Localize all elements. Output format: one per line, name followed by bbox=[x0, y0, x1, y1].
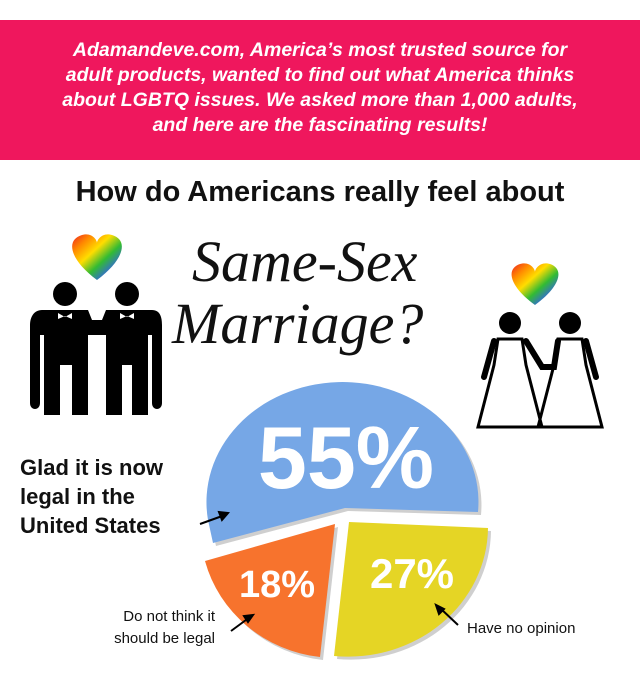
label: 18%: should be legal bbox=[114, 630, 215, 647]
banner: and here are the fascinating results! bbox=[153, 114, 487, 136]
label: 55% bbox=[20, 455, 163, 538]
slice: 18%: 18% bbox=[239, 564, 315, 606]
banner: Adamandeve.com, America’s most trusted source for bbox=[73, 39, 567, 61]
script title line 2: Marriage? bbox=[172, 291, 423, 356]
slice: 55% bbox=[206, 382, 481, 546]
label: 18% bbox=[114, 608, 215, 647]
slice: 55%: 55% bbox=[258, 408, 434, 507]
label: 55%: legal in the bbox=[20, 484, 135, 509]
slice: 27% bbox=[334, 522, 491, 660]
label: 27%: Have no opinion bbox=[467, 620, 575, 637]
banner: adult products, wanted to find out what America thinks bbox=[66, 64, 574, 86]
icon: grooms bbox=[30, 234, 162, 415]
label: 55%: United States bbox=[20, 513, 161, 538]
banner bbox=[0, 20, 640, 160]
slice: 27%: 27% bbox=[370, 550, 454, 597]
banner: about LGBTQ issues. We asked more than 1,000 adults, bbox=[62, 89, 578, 111]
label: 18%: Do not think it bbox=[123, 608, 215, 625]
arrows bbox=[200, 512, 458, 631]
heading: How do Americans really feel about bbox=[76, 176, 564, 208]
label: 55%: Glad it is now bbox=[20, 455, 163, 480]
script title line 1: Same-Sex bbox=[192, 229, 417, 294]
slice: 18% bbox=[205, 524, 338, 660]
icon: brides bbox=[476, 263, 604, 428]
